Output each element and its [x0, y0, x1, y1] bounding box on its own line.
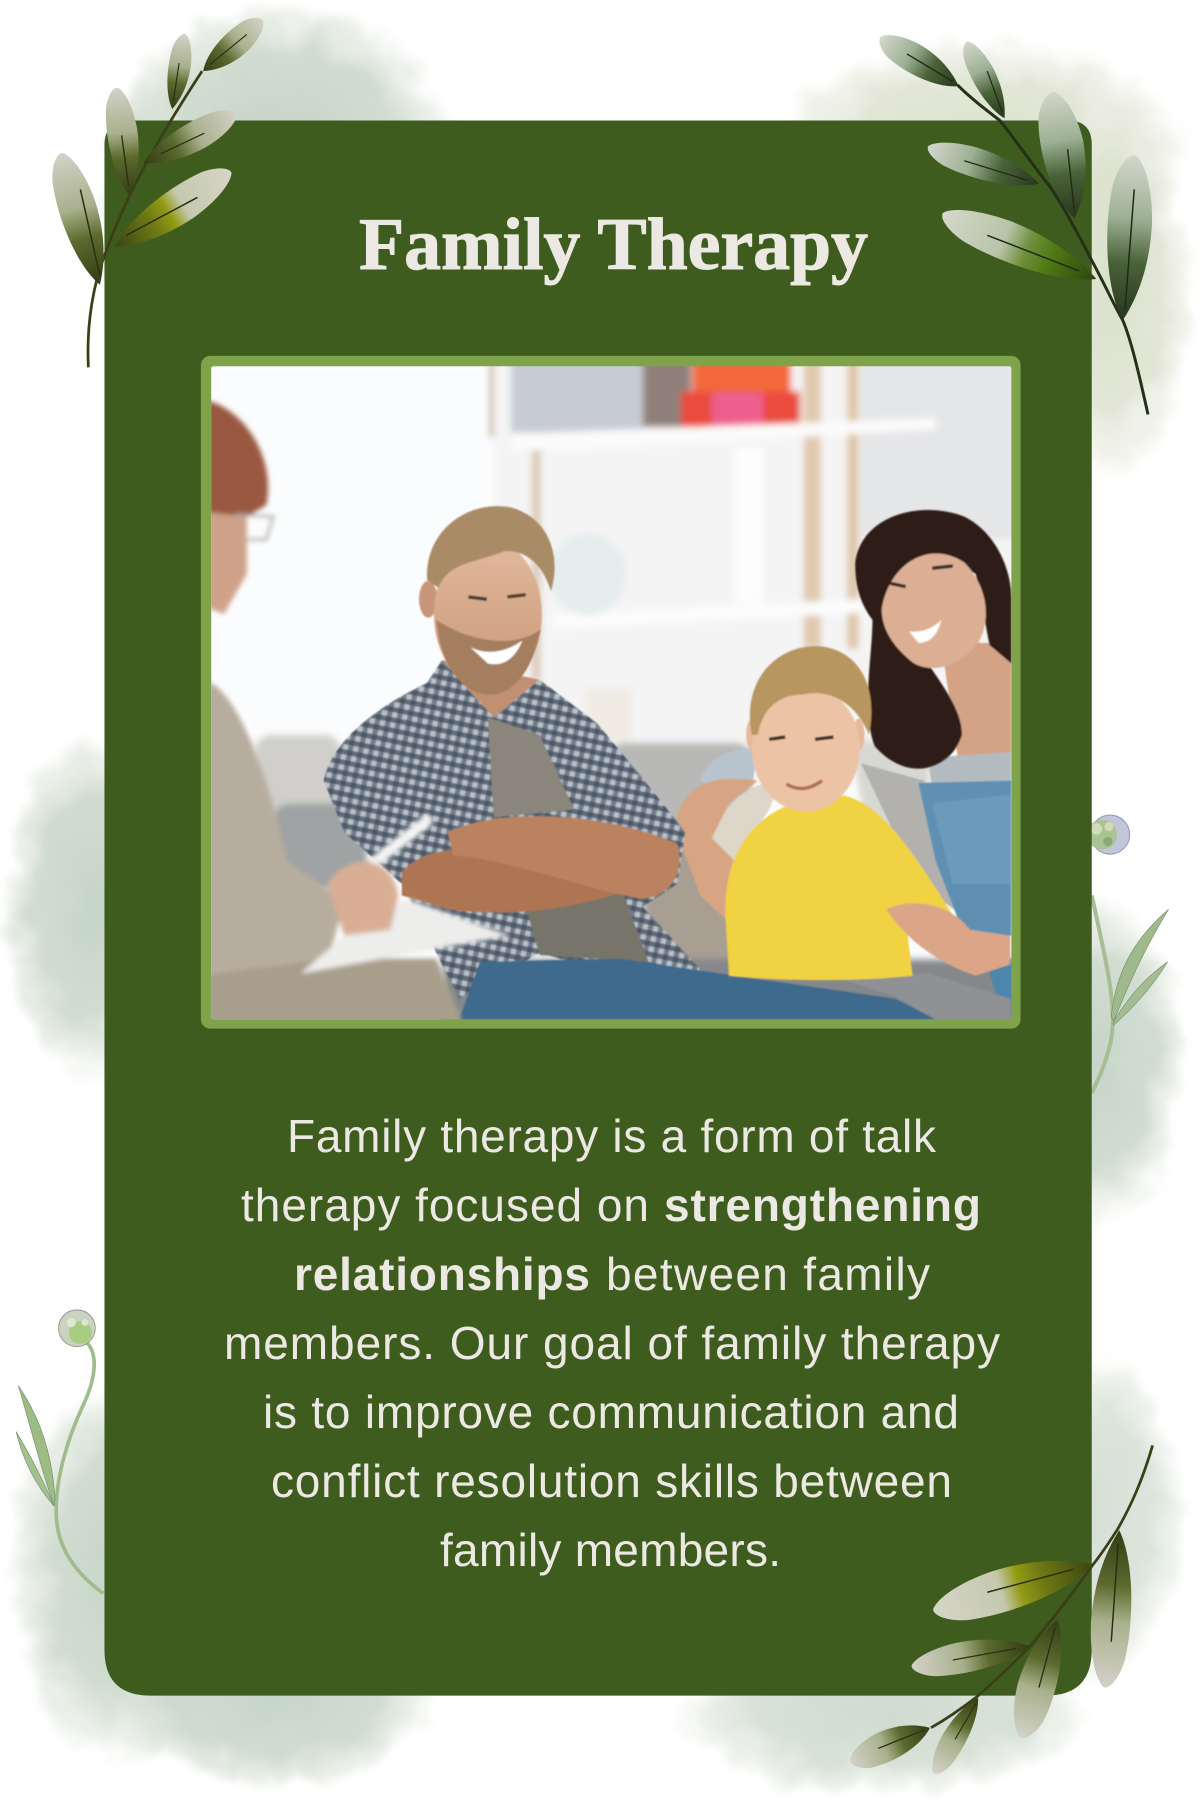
- body paragraph: relationships: [294, 1248, 590, 1300]
- photo: child: [725, 646, 1010, 1019]
- body paragraph: Family therapy is a form of talk: [287, 1110, 937, 1162]
- photo: room background: [195, 350, 1027, 1033]
- photo: father: [324, 506, 936, 1019]
- plant: right bud behind card: [1087, 815, 1169, 1093]
- main green card: [104, 121, 1092, 1696]
- body paragraph: strengthening: [664, 1179, 981, 1231]
- branch: bottom right leaves: [844, 1445, 1153, 1779]
- body paragraph: members. Our goal of family therapy: [224, 1317, 1000, 1369]
- branch: top right leaves: [873, 24, 1158, 414]
- photo frame: [201, 356, 1021, 1029]
- plant: left bud and stem: [16, 1310, 103, 1593]
- body paragraph: family members.: [440, 1524, 781, 1576]
- body paragraph: therapy focused on: [241, 1179, 649, 1231]
- photo: family in a therapy session: [195, 350, 1027, 1033]
- body paragraph: between family: [606, 1248, 930, 1300]
- title: Family Therapy: [359, 204, 868, 286]
- photo: therapist: [195, 396, 511, 1033]
- photo: mother: [677, 510, 1011, 1004]
- body paragraph: [224, 1110, 1000, 1576]
- body paragraph: conflict resolution skills between: [271, 1455, 952, 1507]
- branch: top left leaves: [44, 10, 272, 367]
- photo: people: [195, 396, 1011, 1033]
- body paragraph: is to improve communication and: [263, 1386, 959, 1438]
